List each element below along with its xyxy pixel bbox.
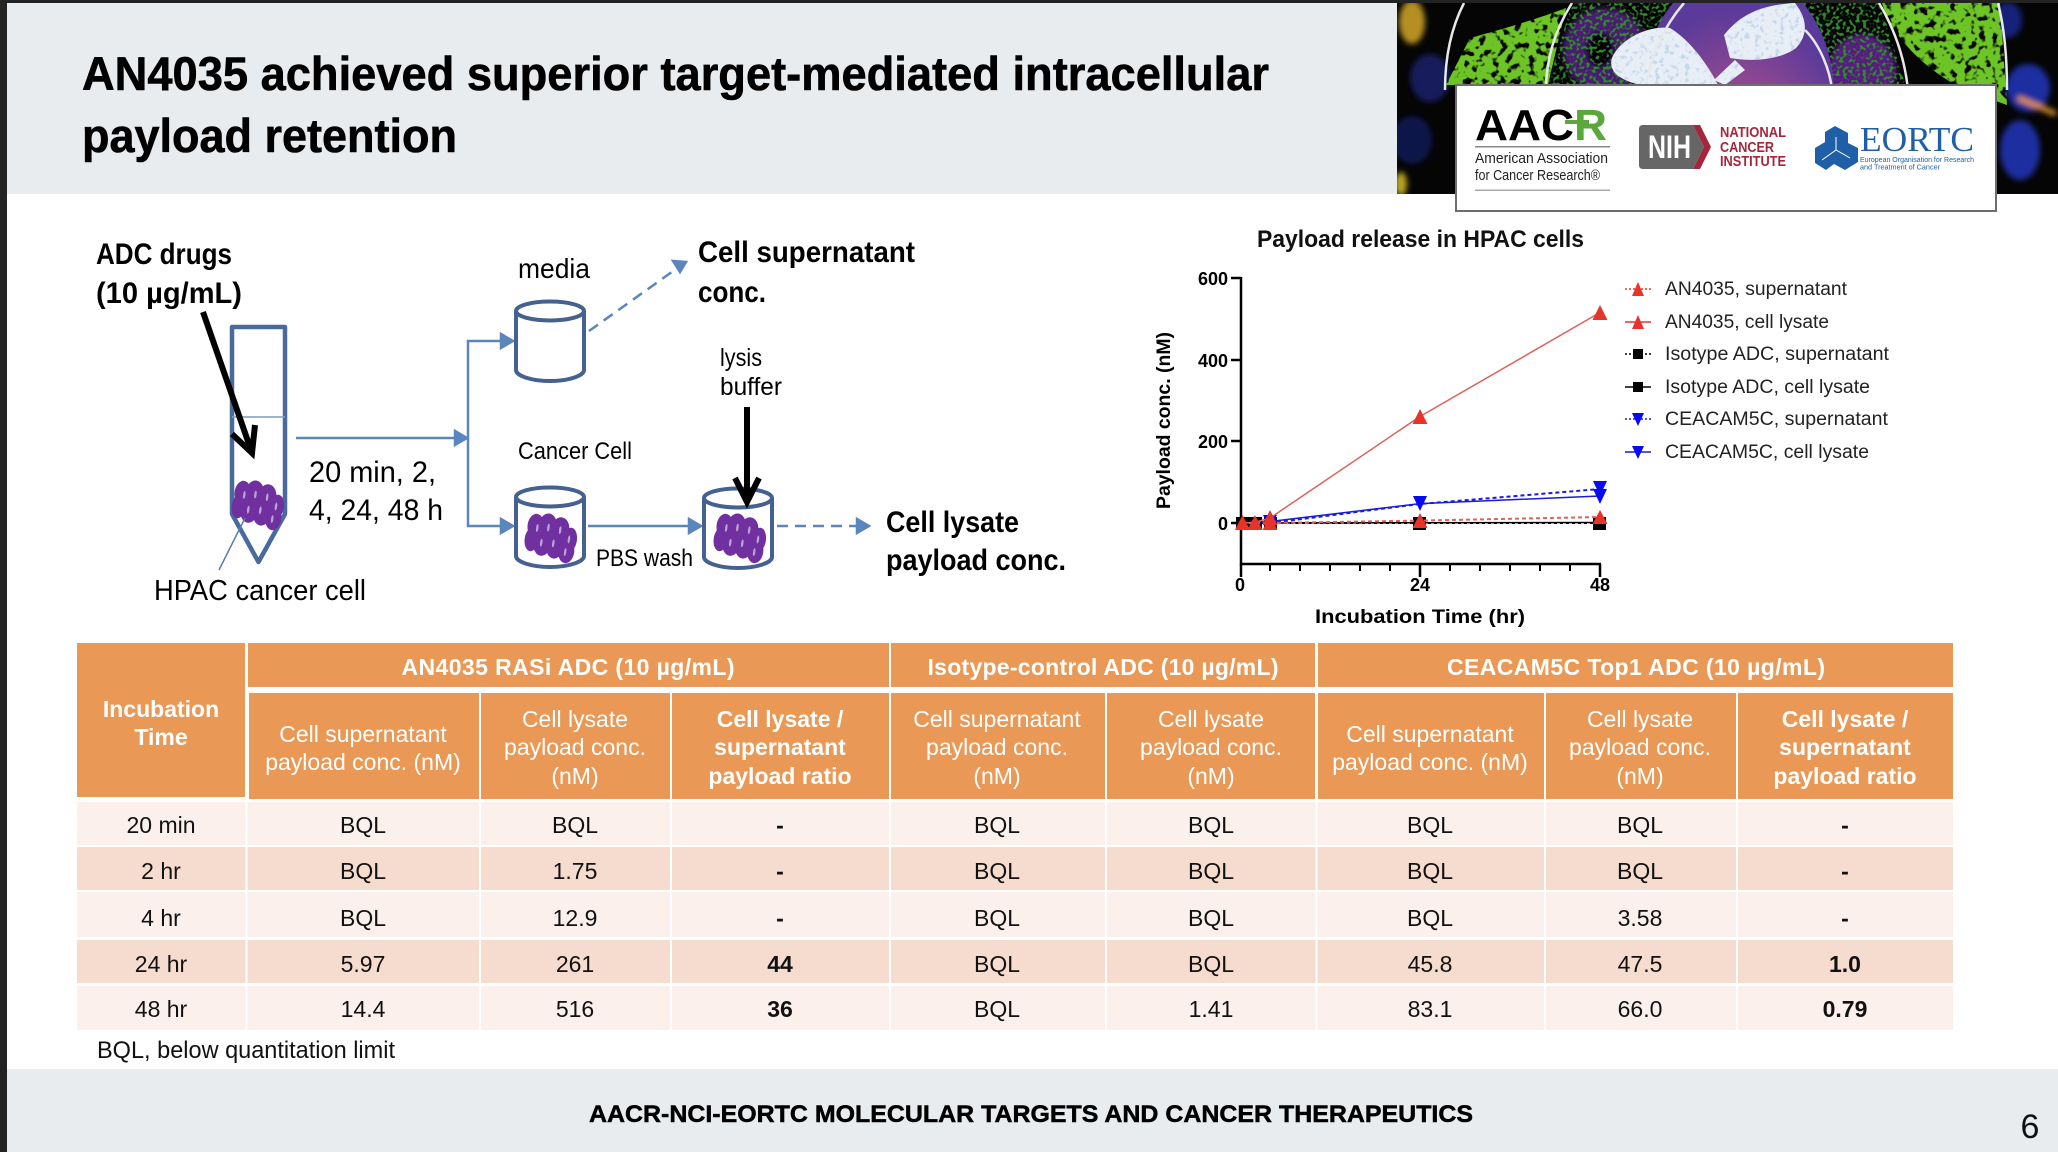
row: 24 hr: 5.97 — [341, 951, 385, 977]
row: 24 hr: 47.5 — [1618, 951, 1662, 977]
row: 20 min — [126, 812, 1849, 838]
row: 4 hr: - — [776, 905, 784, 931]
header: drug groups: AN4035 RASi ADC (10 µg/mL) — [402, 654, 734, 680]
icon: media cylinder — [516, 302, 584, 381]
label: HPAC cancer cell: HPAC cancer cell — [154, 575, 366, 607]
header: CEACAM5C columns: supernatant — [1779, 734, 1911, 760]
row: 2 hr: - — [776, 858, 784, 884]
row: 48 hr: 83.1 — [1408, 996, 1452, 1022]
legend item: Isotype cell lysate: Isotype ADC, cell lysate — [1665, 377, 1870, 398]
icon: cancer cell cylinder — [516, 488, 584, 567]
row: 20 min: BQL — [1188, 812, 1234, 838]
row: 48 hr: 0.79 — [1823, 996, 1867, 1022]
series: AN4035 — [1235, 305, 1608, 530]
row: 2 hr: BQL — [1617, 858, 1663, 884]
axis tick labels: 48 — [1590, 575, 1610, 595]
row: 2 hr: BQL — [1407, 858, 1453, 884]
row: 24 hr: 44 — [767, 951, 793, 977]
row: 48 hr: 14.4 — [341, 996, 386, 1022]
green tissue — [1446, 3, 2007, 105]
chart title: Payload release in HPAC cells — [1257, 226, 1584, 253]
row: 48 hr: 1.41 — [1189, 996, 1233, 1022]
logo: AACR: for Cancer Research® — [1475, 167, 1600, 184]
header: isotype columns: (nM) — [1187, 763, 1235, 789]
icon: lysate cylinder — [704, 488, 772, 568]
row: 24 hr: BQL — [1188, 951, 1234, 977]
logo: NIH National Cancer Institute: NATIONAL — [1720, 125, 1786, 141]
axis tick labels: 0 — [1218, 514, 1228, 534]
line chart: payload release — [1154, 226, 1890, 628]
header: AN4035 columns: Cell supernatant — [279, 721, 447, 747]
row: 24 hr: BQL — [974, 951, 1020, 977]
header: CEACAM5C columns: Cell supernatant — [1346, 721, 1514, 747]
row: 2 hr: BQL — [340, 858, 386, 884]
logo: NIH National Cancer Institute: NIH — [1648, 129, 1691, 165]
header: CEACAM5C columns: payload conc. — [1569, 734, 1711, 760]
logo: NIH National Cancer Institute: INSTITUTE — [1720, 154, 1786, 170]
logo panel — [1456, 85, 1996, 211]
row: 48 hr: 36 — [767, 996, 793, 1022]
row: 48 hr: 66.0 — [1618, 996, 1662, 1022]
arrow: lysis buffer addition — [735, 407, 759, 502]
x axis title: Incubation Time (hr) — [1315, 607, 1525, 628]
series: CEACAM5C — [1242, 481, 1607, 528]
row: 4 hr: - — [1841, 905, 1849, 931]
label: incubation times — [309, 456, 443, 527]
heading: ADC drugs: (10 µg/mL) — [96, 277, 242, 310]
legend item: Isotype supernatant: Isotype ADC, supernatant — [1665, 344, 1890, 365]
label: PBS wash: PBS wash — [596, 545, 693, 572]
header: AN4035 columns: (nM) — [551, 763, 599, 789]
page number: 6 — [2021, 1108, 2039, 1146]
header: isotype columns: payload conc. — [1140, 734, 1282, 760]
row: 4 hr: 12.9 — [553, 905, 597, 931]
row: 4 hr: BQL — [340, 905, 386, 931]
label: HPAC cancer cell — [154, 518, 366, 607]
logo: AACR: AACR — [1475, 101, 1607, 150]
header: AN4035 columns: payload ratio — [708, 763, 852, 789]
label: Cell lysate payload conc.: Cell lysate — [886, 506, 1019, 539]
header: isotype columns: Cell supernatant — [913, 706, 1081, 732]
axis tick labels: 200 — [1198, 432, 1228, 452]
label: lysis buffer: lysis — [720, 344, 762, 372]
row: 24 hr: 261 — [556, 951, 594, 977]
header: CEACAM5C columns: (nM) — [1616, 763, 1664, 789]
header: AN4035 columns: payload conc. (nM) — [265, 749, 461, 775]
row: 4 hr: BQL — [1407, 905, 1453, 931]
title: AN4035 achieved superior target-mediated intracellular — [82, 47, 1269, 100]
header: incubation time: Time — [134, 724, 188, 750]
row: 20 min: - — [776, 812, 784, 838]
row: 2 hr — [141, 858, 1849, 884]
row: 24 hr — [135, 951, 1861, 977]
header photo: fluorescent cells and protein — [1397, 3, 2058, 194]
logo: EORTC: European Organisation for Research — [1860, 157, 1974, 164]
protein structure — [1611, 3, 1805, 85]
icon: tube — [229, 327, 287, 562]
row: 48 hr: 516 — [556, 996, 594, 1022]
row: 48 hr — [135, 996, 1867, 1022]
heading: ADC drugs — [96, 238, 242, 310]
label: Cell supernatant conc. — [698, 236, 915, 309]
legend item: CEACAM5C cell lysate: CEACAM5C, cell lysate — [1665, 442, 1869, 463]
row: 24 hr: 24 hr — [135, 951, 188, 977]
header: CEACAM5C columns: Cell lysate — [1587, 706, 1693, 732]
label: Cell lysate payload conc.: payload conc. — [886, 544, 1066, 577]
logo: AACR — [1475, 101, 1610, 191]
header: CEACAM5C columns: payload conc. (nM) — [1332, 749, 1528, 775]
workflow diagram — [96, 236, 1066, 607]
row: 20 min: BQL — [1407, 812, 1453, 838]
header: incubation time — [103, 696, 219, 750]
row: 4 hr: 4 hr — [141, 905, 181, 931]
header: isotype columns — [913, 706, 1282, 789]
row shading — [77, 802, 1953, 1030]
row: 20 min: - — [1841, 812, 1849, 838]
arrows: split to media and cells — [296, 334, 513, 533]
logo: AACR: American Association — [1475, 150, 1608, 167]
footer band — [7, 1069, 2058, 1152]
row: 24 hr: 1.0 — [1829, 951, 1861, 977]
header: AN4035 columns: Cell lysate / — [717, 706, 844, 732]
logo: NIH National Cancer Institute: CANCER — [1720, 140, 1774, 156]
row: 4 hr: 3.58 — [1618, 905, 1662, 931]
label: Cell supernatant conc.: conc. — [698, 276, 766, 309]
legend item: AN4035 cell lysate: AN4035, cell lysate — [1665, 312, 1829, 333]
heading: ADC drugs: ADC drugs — [96, 238, 232, 271]
row: 2 hr: BQL — [974, 858, 1020, 884]
title band — [7, 3, 1397, 194]
label: Cancer Cell: Cancer Cell — [518, 438, 632, 465]
header: isotype columns: (nM) — [973, 763, 1021, 789]
label: media: media — [518, 253, 590, 284]
row: 2 hr: 1.75 — [553, 858, 597, 884]
axes — [1231, 277, 1601, 577]
row: 48 hr: BQL — [974, 996, 1020, 1022]
axis tick labels — [1198, 269, 1610, 595]
footer text: AACR-NCI-EORTC MOLECULAR TARGETS AND CANCER THERAPEUTICS — [589, 1101, 1473, 1128]
legend — [1625, 279, 1890, 463]
centre disk — [1656, 3, 1834, 84]
label: Cell supernatant conc.: Cell supernatant — [698, 236, 915, 269]
row: 4 hr: BQL — [1188, 905, 1234, 931]
title — [82, 47, 1269, 162]
axis tick labels: 24 — [1410, 575, 1430, 595]
header: CEACAM5C columns: payload ratio — [1773, 763, 1917, 789]
header: drug groups: CEACAM5C Top1 ADC (10 µg/mL) — [1447, 654, 1825, 680]
header: isotype columns: payload conc. — [926, 734, 1068, 760]
footnote: BQL, below quantitation limit — [97, 1037, 395, 1064]
label: lysis buffer — [720, 344, 782, 401]
axis tick labels: 0 — [1235, 575, 1245, 595]
label: Cell lysate payload conc. — [886, 506, 1066, 577]
label: incubation times: 4, 24, 48 h — [309, 494, 443, 527]
green speckle — [1546, 3, 1907, 90]
row: 20 min: BQL — [974, 812, 1020, 838]
logo: EORTC: and Treatment of Cancer — [1860, 164, 1941, 172]
row: 20 min: BQL — [1617, 812, 1663, 838]
row: 2 hr: - — [1841, 858, 1849, 884]
arrow: dashed to lysate — [777, 519, 869, 533]
white ring arcs — [1445, 3, 2007, 90]
row: 20 min: BQL — [340, 812, 386, 838]
row: 48 hr: 48 hr — [135, 996, 188, 1022]
row: 24 hr: 45.8 — [1408, 951, 1452, 977]
header: isotype columns: Cell lysate — [1158, 706, 1264, 732]
axis tick labels: 600 — [1198, 269, 1228, 289]
table header — [77, 643, 1953, 799]
row: 4 hr — [141, 905, 1849, 931]
header: CEACAM5C columns — [1332, 706, 1917, 789]
arrow: drug addition — [203, 312, 255, 453]
header: AN4035 columns: Cell lysate — [522, 706, 628, 732]
row: 4 hr: BQL — [974, 905, 1020, 931]
data table — [77, 643, 1953, 1030]
header: AN4035 columns: supernatant — [714, 734, 846, 760]
header: AN4035 columns — [265, 706, 852, 789]
legend item: AN4035 supernatant: AN4035, supernatant — [1665, 279, 1848, 300]
y axis title: Payload conc. (nM) — [1154, 332, 1175, 509]
arrow: dashed to supernatant — [589, 261, 686, 331]
header: AN4035 columns: payload conc. — [504, 734, 646, 760]
row: 2 hr: 2 hr — [141, 858, 181, 884]
row: 20 min: BQL — [552, 812, 598, 838]
logo: NIH National Cancer Institute — [1639, 125, 1786, 170]
label: incubation times: 20 min, 2, — [309, 456, 436, 489]
title: payload retention — [82, 109, 457, 162]
logo: EORTC: EORTC — [1860, 120, 1974, 159]
logo: EORTC — [1815, 120, 1974, 172]
header: drug groups — [402, 654, 1825, 680]
series: isotype — [1236, 517, 1606, 530]
arrow: PBS wash — [588, 519, 701, 533]
label: lysis buffer: buffer — [720, 373, 782, 401]
row: 20 min: 20 min — [126, 812, 196, 838]
header: CEACAM5C columns: Cell lysate / — [1782, 706, 1909, 732]
row: 2 hr: BQL — [1188, 858, 1234, 884]
axis tick labels: 400 — [1198, 351, 1228, 371]
header: incubation time: Incubation — [103, 696, 219, 722]
header: drug groups: Isotype-control ADC (10 µg/mL) — [928, 654, 1278, 680]
legend item: CEACAM5C supernatant: CEACAM5C, supernatant — [1665, 409, 1889, 430]
